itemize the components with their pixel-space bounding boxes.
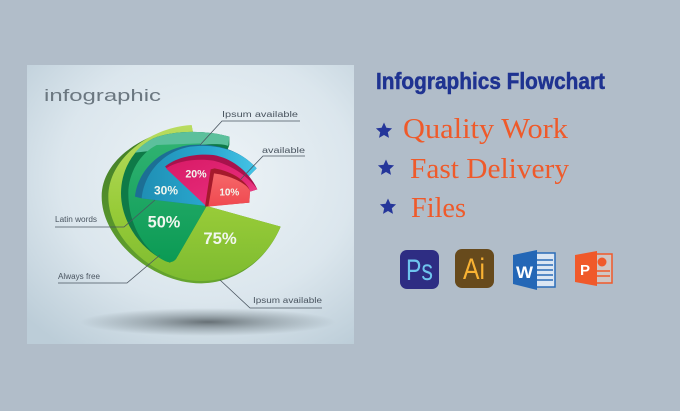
icon: Photoshop xyxy=(400,250,439,289)
icon: Word: W xyxy=(516,263,534,282)
75% slice with lime ring xyxy=(108,125,281,281)
icon: PowerPoint: P xyxy=(580,262,590,279)
pie chart xyxy=(102,125,281,283)
title: Infographics Flowchart xyxy=(376,68,605,94)
text: Quality Work: Quality Work xyxy=(403,114,568,145)
20% slice: 20% xyxy=(185,169,207,181)
20% slice xyxy=(165,155,257,206)
icon: PowerPoint xyxy=(575,251,612,286)
50% slice with dark edge and teal arc: 50% xyxy=(148,213,181,231)
50% slice with dark edge and teal arc xyxy=(121,132,229,263)
star 2 xyxy=(378,160,394,175)
icon: Illustrator xyxy=(455,249,494,288)
dark green outer edge xyxy=(102,126,281,283)
icon: Word xyxy=(513,250,555,290)
heading: infographic: infographic xyxy=(44,86,162,105)
star 1 xyxy=(376,122,392,138)
10% slice: 10% xyxy=(219,187,239,198)
label: Ipsum available top: Ipsum available xyxy=(222,110,299,119)
star 3 xyxy=(380,198,396,214)
label: Latin words: Latin words xyxy=(55,215,97,224)
10% slice xyxy=(205,168,250,207)
label: available: available xyxy=(262,146,306,155)
30% slice with blue arc xyxy=(135,145,257,206)
icon: Illustrator: Ai xyxy=(463,253,485,286)
label: Always free: Always free xyxy=(58,272,101,281)
ground shadow xyxy=(80,308,336,336)
label: Ipsum available bottom: Ipsum available xyxy=(253,296,323,305)
panel: infographic illustration xyxy=(27,65,354,344)
text: Files: Files xyxy=(411,193,466,224)
30% slice with blue arc: 30% xyxy=(154,183,178,197)
75% slice with lime ring: 75% xyxy=(203,229,237,248)
text: Fast Delivery: Fast Delivery xyxy=(410,154,569,185)
icon: Photoshop: Ps xyxy=(406,254,433,287)
leader lines xyxy=(55,121,322,308)
